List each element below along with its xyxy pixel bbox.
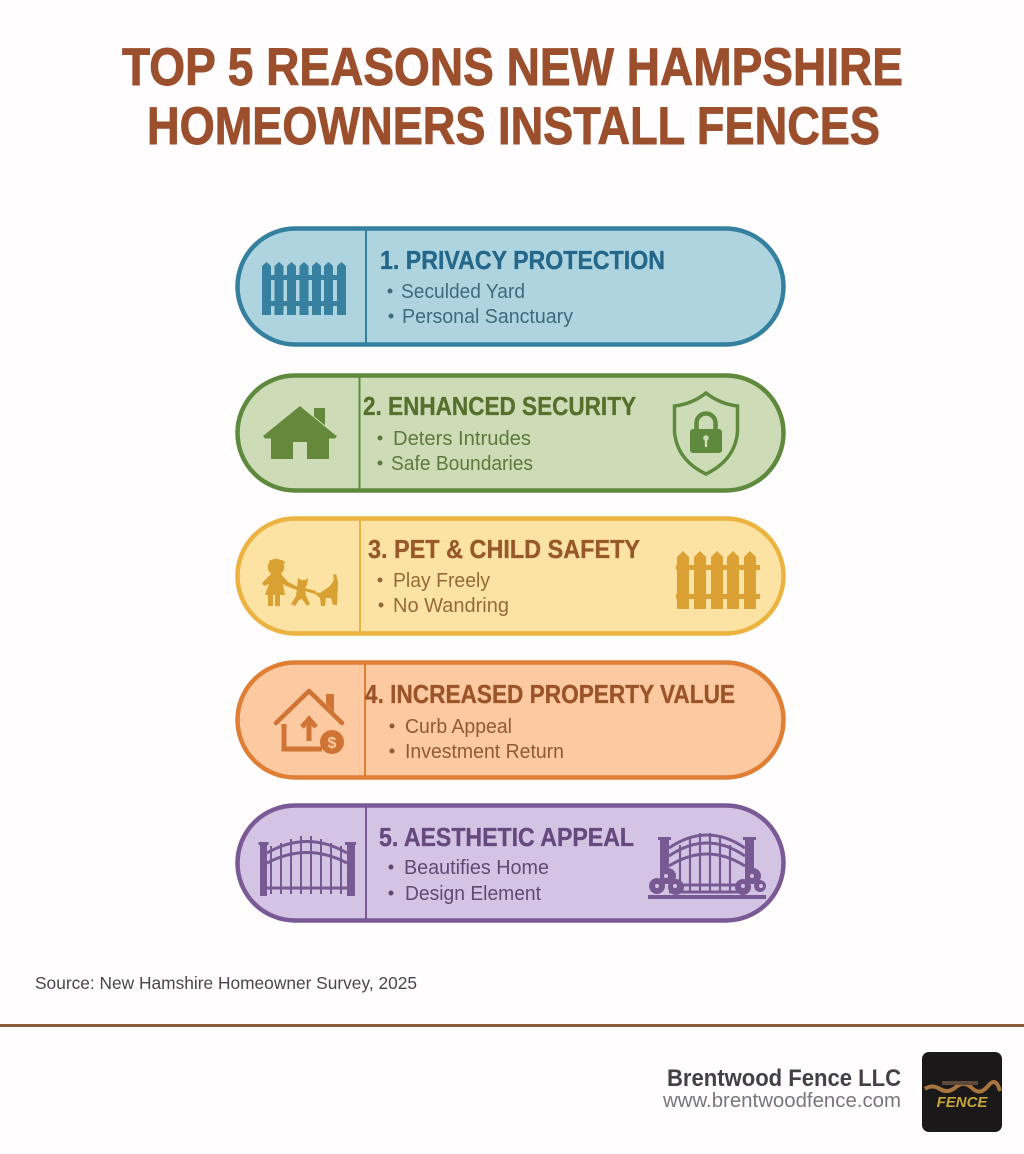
footer website: www.brentwoodfence.com <box>662 1090 901 1112</box>
logo: FENCE <box>937 1094 988 1111</box>
bullet list: safety: Play Freely <box>393 570 490 592</box>
panel: enhanced security <box>238 376 784 490</box>
heading: privacy protection: 1. PRIVACY PROTECTION <box>380 245 665 275</box>
bullet list: privacy <box>388 281 573 328</box>
heading: increased property value: 4. INCREASED PROPERTY VALUE <box>365 679 735 709</box>
bullet list: security: Deters Intrudes <box>393 428 531 450</box>
bullet list: value: Curb Appeal <box>405 716 512 738</box>
icon: child with dog and cat <box>262 559 338 606</box>
title: HOMEOWNERS INSTALL FENCES <box>147 97 880 156</box>
icon: house <box>263 406 337 459</box>
panel: aesthetic appeal <box>238 806 784 920</box>
icon: wrought iron gate <box>258 836 356 896</box>
bullet list: aesthetic: Design Element <box>405 883 541 905</box>
bullet list: value <box>390 716 564 763</box>
bullet list: privacy: Seculded Yard <box>401 281 525 303</box>
icon: wooden fence <box>676 551 760 609</box>
bullet list: privacy: Personal Sanctuary <box>402 306 573 328</box>
bullet list: aesthetic: Beautifies Home <box>404 857 549 879</box>
icon: house with arrow and coin <box>276 691 344 754</box>
icon: ornate gate with shrubs <box>648 833 766 899</box>
bullet list: security: Safe Boundaries <box>391 453 533 475</box>
panel: pet and child safety <box>238 518 784 634</box>
title <box>122 38 903 156</box>
panel: increased property value <box>238 662 784 778</box>
bullet list: safety <box>378 570 509 617</box>
heading: aesthetic appeal: 5. AESTHETIC APPEAL <box>379 822 634 852</box>
icon: shield with padlock <box>674 393 738 474</box>
heading: enhanced security: 2. ENHANCED SECURITY <box>363 391 636 421</box>
icon: house with arrow and coin: $ <box>328 735 337 752</box>
source note: Source: New Hamshire Homeowner Survey, 2025 <box>35 973 417 993</box>
bullet list: security <box>378 428 533 475</box>
bullet list: value: Investment Return <box>405 741 564 763</box>
footer company name: Brentwood Fence LLC <box>667 1065 901 1092</box>
bullet list: safety: No Wandring <box>393 595 509 617</box>
title: TOP 5 REASONS NEW HAMPSHIRE <box>122 38 903 97</box>
icon: picket fence <box>262 262 346 315</box>
bullet list: aesthetic <box>388 857 549 905</box>
panel: privacy protection <box>238 228 784 344</box>
logo <box>922 1052 1002 1132</box>
heading: pet and child safety: 3. PET & CHILD SAFETY <box>368 534 640 564</box>
